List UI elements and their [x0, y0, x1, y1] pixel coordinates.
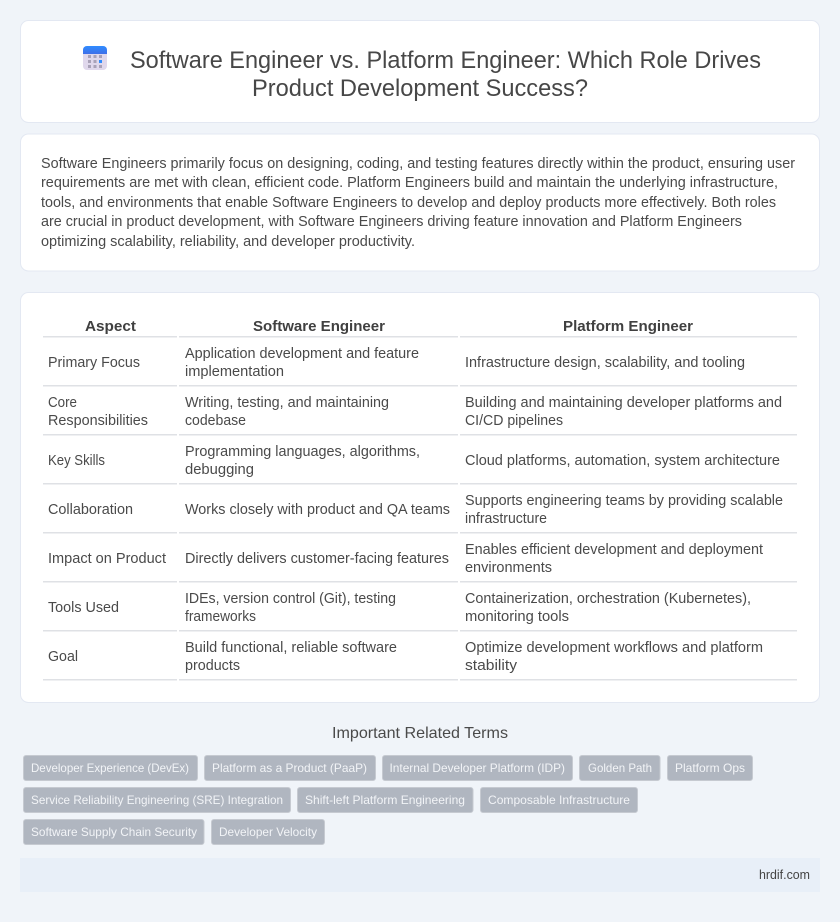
tag list: related terms: Composable Infrastructure [488, 793, 630, 807]
row: collaboration: Supports engineering teams by providing scalable [465, 493, 783, 509]
row: impact on product [43, 542, 797, 582]
row: tools used: frameworks [185, 609, 256, 625]
panel: header [20, 20, 820, 122]
text block: introduction: tools, and environments that enable Software Engineers to develop and deploy products more effectively. Both roles [41, 195, 776, 211]
row: impact on product: environments [465, 560, 552, 576]
row: key skills: Cloud platforms, automation, system architecture [465, 453, 780, 469]
tag list: related terms: Platform as a Product (PaaP) [212, 761, 367, 775]
footer [20, 858, 820, 892]
row: collaboration: infrastructure [465, 511, 547, 527]
row: collaboration: Works closely with product and QA teams [185, 502, 450, 518]
row: core responsibilities: Responsibilities [48, 413, 148, 429]
row: tools used [43, 591, 797, 632]
table header: Platform Engineer [563, 318, 693, 335]
row: collaboration: Collaboration [48, 502, 133, 518]
title: Software Engineer vs. Platform Engineer: Which Role Drives [130, 47, 761, 74]
row: core responsibilities [43, 395, 797, 436]
row: primary focus: Primary Focus [48, 355, 140, 371]
table header [43, 318, 797, 338]
table header: Aspect [85, 318, 136, 335]
row: impact on product: Directly delivers customer-facing features [185, 551, 449, 567]
tag list: related terms: Shift-left Platform Engineering [305, 793, 465, 807]
row: goal: Optimize development workflows and platform [465, 640, 763, 656]
tag list: related terms: Developer Velocity [219, 825, 317, 839]
title [130, 47, 761, 102]
icon: calendar [83, 46, 107, 70]
row: goal: Build functional, reliable software [185, 640, 397, 656]
row: collaboration [43, 493, 797, 534]
row: core responsibilities: Core [48, 395, 77, 411]
tag list: related terms: Internal Developer Platform (IDP) [390, 761, 565, 775]
row: goal: stability [465, 658, 518, 674]
row: key skills [43, 444, 797, 484]
tag list: related terms: Developer Experience (DevEx) [31, 761, 189, 775]
row: impact on product: Impact on Product [48, 551, 166, 567]
text block: introduction: Software Engineers primarily focus on designing, coding, and testing features directly within the product, ensuring user [41, 156, 795, 172]
row: core responsibilities: Building and maintaining developer platforms and [465, 395, 782, 411]
row: goal: Goal [48, 649, 78, 665]
row: goal [43, 640, 797, 680]
row: primary focus: implementation [185, 364, 284, 380]
row: primary focus [43, 346, 797, 386]
footer: hrdif.com [759, 868, 810, 882]
row: core responsibilities: Writing, testing, and maintaining [185, 395, 389, 411]
row: tools used: Tools Used [48, 600, 119, 616]
row: core responsibilities: CI/CD pipelines [465, 413, 563, 429]
tag list: related terms: Service Reliability Engineering (SRE) Integration [31, 793, 283, 807]
row: primary focus: Infrastructure design, scalability, and tooling [465, 355, 745, 371]
row: core responsibilities: codebase [185, 413, 246, 429]
tag list: related terms: Software Supply Chain Security [31, 825, 197, 839]
text block: introduction: are crucial in product development, with Software Engineers driving feature innovation and Platform Engineers [41, 214, 742, 230]
row: tools used: IDEs, version control (Git), testing [185, 591, 396, 607]
panel: introduction [20, 134, 820, 271]
tag list: related terms: Platform Ops [675, 761, 745, 775]
row: goal: products [185, 658, 240, 674]
text block: introduction: optimizing scalability, reliability, and developer productivity. [41, 234, 415, 250]
row: tools used: Containerization, orchestration (Kubernetes), [465, 591, 751, 607]
row: key skills: Programming languages, algorithms, [185, 444, 420, 460]
text block: introduction [41, 156, 795, 250]
row: primary focus: Application development and feature [185, 346, 419, 362]
row: tools used: monitoring tools [465, 609, 569, 625]
table header: Software Engineer [253, 318, 385, 335]
row: key skills: debugging [185, 462, 254, 478]
panel: comparison table [20, 292, 820, 702]
row: key skills: Key Skills [48, 453, 105, 469]
tag list: related terms: Golden Path [588, 761, 652, 775]
text block: introduction: requirements are met with clean, efficient code. Platform Engineers build and maintain the underlying infrastructure, [41, 175, 778, 191]
row: impact on product: Enables efficient development and deployment [465, 542, 763, 558]
title: Product Development Success? [252, 75, 588, 102]
heading: important related terms: Important Related Terms [332, 725, 508, 742]
tag list: related terms [24, 756, 752, 844]
